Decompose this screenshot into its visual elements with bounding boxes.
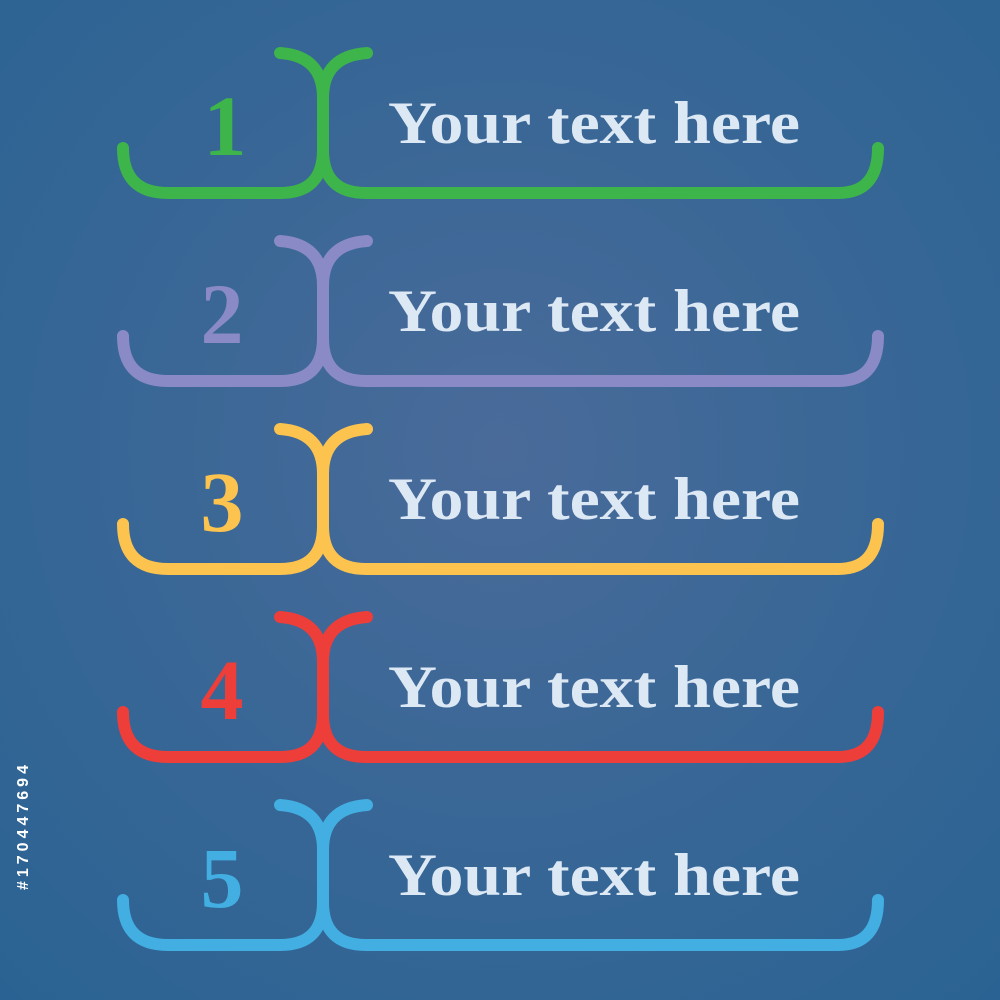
number 5: 5 <box>200 830 244 926</box>
text 4: Your text here <box>388 654 800 720</box>
item 2 <box>123 241 878 381</box>
bracket 3 <box>123 429 878 569</box>
number 2: 2 <box>200 266 244 362</box>
item 5 <box>123 805 878 945</box>
bracket 5 <box>123 805 878 945</box>
number 1: 1 <box>204 78 246 174</box>
text 3: Your text here <box>388 466 800 532</box>
bracket 2 <box>123 241 878 381</box>
number 3: 3 <box>200 454 244 550</box>
text 2: Your text here <box>388 278 800 344</box>
item 3 <box>123 429 878 569</box>
bracket 1 <box>123 53 878 193</box>
side id text: #170447694 <box>15 765 32 890</box>
bracket 4 <box>123 617 878 757</box>
text 1: Your text here <box>388 90 800 156</box>
number 4: 4 <box>200 642 244 738</box>
item 1 <box>123 53 878 193</box>
item 4 <box>123 617 878 757</box>
text 5: Your text here <box>388 842 800 908</box>
